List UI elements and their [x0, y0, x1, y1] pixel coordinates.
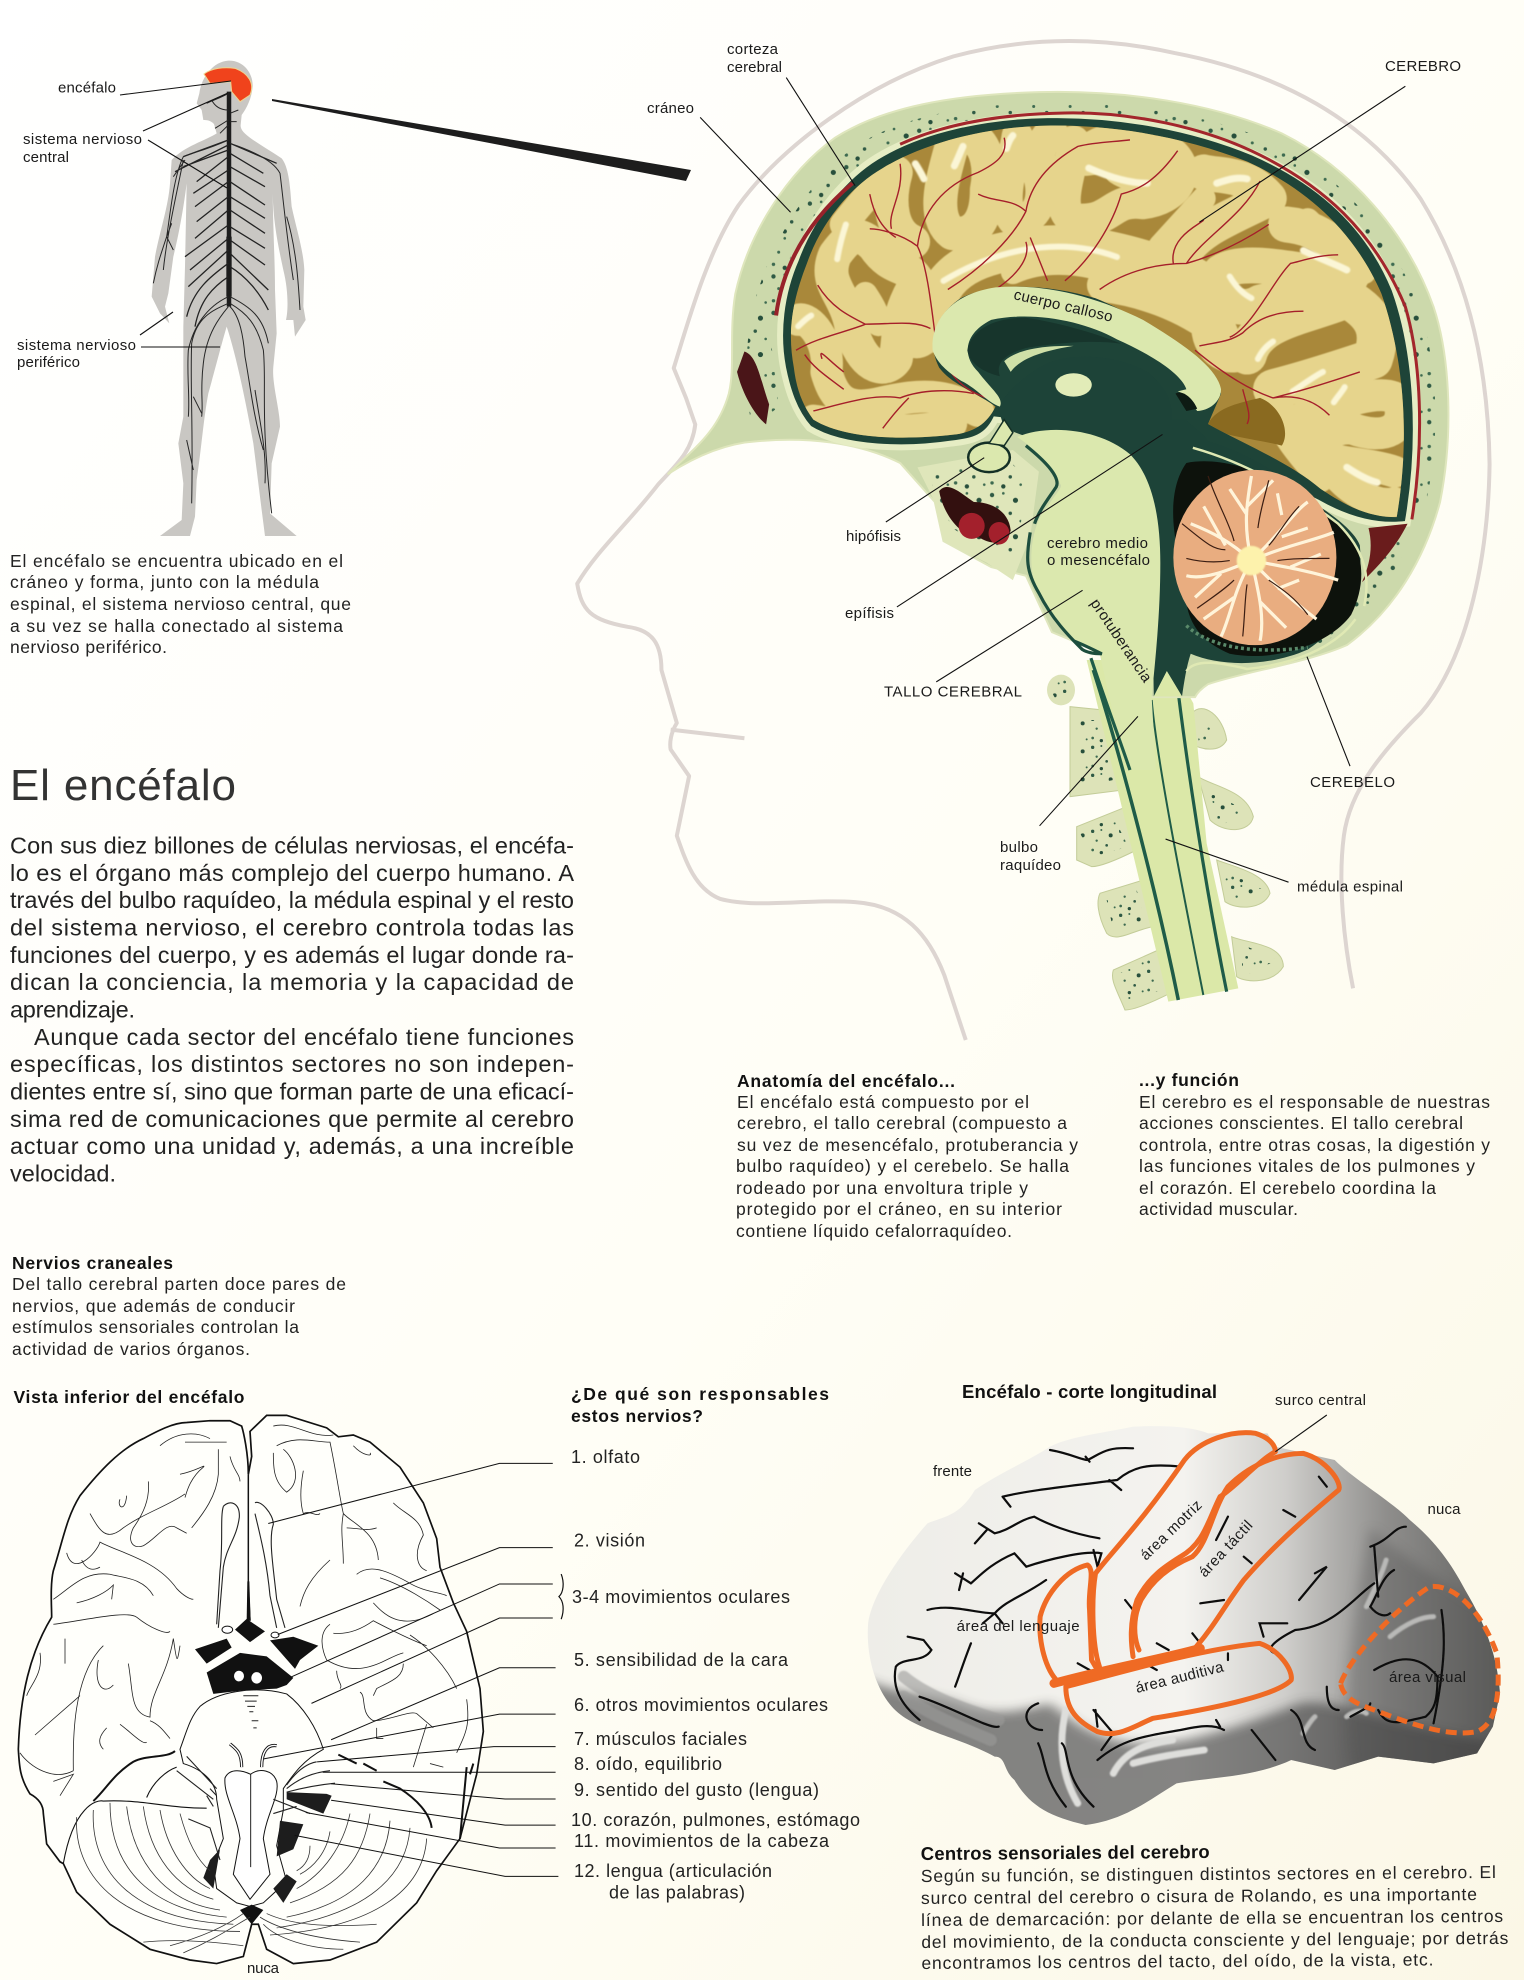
panel: nerve function list	[571, 1384, 860, 1902]
text block: main article: lo es el órgano más complejo del cuerpo humano. A	[10, 860, 574, 886]
head profile outline	[577, 41, 1490, 1040]
body silhouette with nerves	[152, 61, 306, 536]
leader lines	[700, 78, 1405, 882]
nerve 5: 5. sensibilidad de la cara	[574, 1650, 789, 1670]
heading: Encéfalo - corte longitudinal: Encéfalo - corte longitudinal	[962, 1381, 1217, 1402]
text block: sensory centres: surco central del cerebro o cisura de Rolando, es una importante	[921, 1884, 1477, 1908]
text block: cranial nerves	[12, 1253, 346, 1359]
text block: function	[1139, 1070, 1490, 1219]
massa intermedia	[1055, 373, 1092, 397]
pale wedge between cord tracts	[1154, 671, 1182, 696]
skin and skull	[668, 92, 1448, 697]
text block: anatomy: contiene líquido cefalorraquídeo.	[736, 1221, 1012, 1241]
leader lines	[120, 81, 231, 347]
text block: main article: actuar como una unidad y, además, a una increíble	[10, 1133, 574, 1159]
nerve 12: 12. lengua (articulación	[574, 1861, 772, 1881]
text block: main article	[10, 832, 574, 1186]
label: TALLO CEREBRAL: TALLO CEREBRAL	[884, 684, 1022, 700]
label: bulbo: bulbo	[1000, 839, 1038, 856]
nerve 12 second line: de las palabras)	[609, 1882, 745, 1902]
label: corteza cerebral: corteza	[727, 41, 779, 58]
label: CEREBRO: CEREBRO	[1385, 58, 1461, 75]
text block: anatomy: su vez de mesencéfalo, protuberancia y	[737, 1135, 1078, 1155]
text block: sensory centres: del movimiento, de la conducta consciente y del lenguaje; por detrás	[921, 1928, 1509, 1952]
text block: main article: sima red de comunicaciones que permite al cerebro	[10, 1106, 574, 1132]
nerve 1: 1. olfato	[571, 1447, 640, 1467]
label: sistema nervioso periférico: sistema nervioso	[17, 337, 136, 354]
text block: main article: aprendizaje.	[10, 996, 135, 1022]
text block: sensory centres: línea de demarcación: por delante de ella se encuentran los centros	[921, 1906, 1503, 1930]
text block: anatomy: rodeado por una envoltura triple y	[736, 1178, 1028, 1198]
text block: cranial nerves: Nervios craneales	[12, 1253, 173, 1273]
text block: main article: del sistema nervioso, el cerebro controla todas las	[10, 914, 574, 940]
label: área del lenguaje: área del lenguaje	[957, 1618, 1080, 1635]
text block: anatomy: Anatomía del encéfalo...	[737, 1071, 955, 1091]
text block: sensory centres: encontramos los centros del tacto, del oído, de la vista, etc.	[921, 1949, 1433, 1973]
panel: human nervous system figure	[17, 61, 306, 536]
illustration	[668, 92, 1448, 770]
heading: El encéfalo: El encéfalo	[10, 761, 236, 810]
label: área auditiva: área auditiva	[1134, 1658, 1226, 1697]
text block: anatomy	[736, 1071, 1078, 1241]
text block: main article: dientes entre sí, sino que forman parte de una eficací-	[10, 1078, 574, 1104]
text block: function: las funciones vitales de los pulmones y	[1139, 1156, 1475, 1176]
text block: cranial nerves: estímulos sensoriales controlan la	[12, 1317, 299, 1337]
label: sistema nervioso central: sistema nervioso	[23, 131, 142, 148]
label: periférico: periférico	[17, 354, 80, 371]
label: cráneo: cráneo	[647, 100, 694, 117]
leader lines	[264, 1463, 563, 1876]
label: CEREBELO: CEREBELO	[1310, 774, 1395, 791]
text block: function: ...y función	[1139, 1070, 1239, 1090]
label: encéfalo: encéfalo	[58, 80, 116, 96]
cerebellum dark pocket	[1173, 461, 1361, 656]
ventricle	[967, 318, 1121, 376]
text block: intro paragraph: cráneo y forma, junto con la médula	[10, 572, 319, 592]
blood vessels	[796, 138, 1360, 428]
text block: function: controla, entre otras cosas, la digestión y	[1139, 1135, 1490, 1155]
text block: main article: través del bulbo raquídeo, la médula espinal y el resto	[10, 887, 574, 913]
panel: lateral brain with sensory areas	[856, 1392, 1505, 1843]
text block: main article: velocidad.	[10, 1160, 116, 1186]
brain illustration	[856, 1415, 1505, 1843]
text block: intro paragraph: El encéfalo se encuentra ubicado en el	[10, 551, 343, 571]
arrow: pointer from head to enlarged brain	[272, 99, 691, 181]
label: cerebral: cerebral	[727, 59, 782, 76]
text block: main article: Con sus diez billones de células nerviosas, el encéfa-	[10, 832, 574, 858]
text block: main article: específicas, los distintos sectores no son indepen-	[10, 1051, 574, 1077]
lower spinal cord and vertebrae	[1047, 660, 1283, 1010]
text block: function: actividad muscular.	[1139, 1199, 1298, 1219]
stem edges	[1026, 446, 1102, 654]
text block: main article: dican la conciencia, la memoria y la capacidad de	[10, 969, 574, 995]
nerve 11: 11. movimientos de la cabeza	[574, 1831, 830, 1851]
text block: main article: Aunque cada sector del encéfalo tiene funciones	[34, 1024, 574, 1050]
text block: sensory centres: Según su función, se distinguen distintos sectores en el cerebro. El	[921, 1862, 1496, 1886]
label: surco central: surco central	[1275, 1392, 1366, 1409]
text block: anatomy: El encéfalo está compuesto por el	[737, 1092, 1029, 1112]
cerebrum gyri	[790, 126, 1404, 518]
red sinus shapes	[737, 352, 769, 424]
label: nuca: nuca	[1428, 1501, 1461, 1518]
panel: brain cross-section	[647, 41, 1461, 1010]
nerve 9: 9. sentido del gusto (lengua)	[574, 1780, 819, 1800]
label: nuca: nuca	[247, 1960, 280, 1977]
corpus callosum	[932, 287, 1221, 411]
label: epífisis: epífisis	[845, 605, 894, 622]
brain drawing	[18, 1415, 483, 1964]
text block: sensory centres	[921, 1839, 1509, 1973]
stalk	[989, 420, 1013, 446]
question heading line 2: estos nervios?	[571, 1406, 703, 1426]
label: central: central	[23, 149, 69, 166]
brain stem	[1017, 430, 1160, 770]
heading: Vista inferior del encéfalo: Vista inferior del encéfalo	[14, 1387, 244, 1407]
nerve 6: 6. otros movimientos oculares	[574, 1695, 828, 1715]
text block: cranial nerves: Del tallo cerebral parten doce pares de	[12, 1274, 346, 1294]
text block: function: el corazón. El cerebelo coordina la	[1139, 1178, 1436, 1198]
nerve 8: 8. oído, equilibrio	[574, 1754, 722, 1774]
label: cerebro medio: cerebro medio	[1047, 535, 1148, 552]
nerves 3-4: 3-4 movimientos oculares	[572, 1587, 790, 1607]
cerebellum arbor	[1182, 476, 1338, 641]
nerve 2: 2. visión	[574, 1530, 645, 1550]
label: área táctil: área táctil	[1195, 1517, 1256, 1581]
membrane	[780, 115, 1416, 525]
text block: anatomy: protegido por el cráneo, en su interior	[736, 1199, 1062, 1219]
label: hipófisis: hipófisis	[846, 528, 901, 545]
pale membrane over cerebellum	[1186, 448, 1367, 671]
small pale ventricle strip	[1004, 346, 1074, 372]
text block: sensory centres: Centros sensoriales del cerebro	[921, 1841, 1210, 1864]
question heading: ¿De qué son responsables	[571, 1384, 829, 1404]
cerebellum foliage	[1173, 470, 1336, 645]
text block: anatomy: bulbo raquídeo) y el cerebelo. Se halla	[736, 1156, 1069, 1176]
dark core around stem	[998, 357, 1360, 696]
label: o mesencéfalo: o mesencéfalo	[1047, 552, 1150, 569]
text block: cranial nerves: actividad de varios órganos.	[12, 1339, 250, 1359]
cerebellum ribbing	[1186, 626, 1308, 650]
text block: intro paragraph: a su vez se halla conectado al sistema	[10, 616, 343, 636]
text block: cranial nerves: nervios, que además de conducir	[12, 1296, 295, 1316]
label: médula espinal: médula espinal	[1297, 878, 1403, 896]
stalk and pituitary	[968, 443, 1010, 472]
label: protuberancia: protuberancia	[1087, 596, 1155, 686]
text block: function: acciones conscientes. El tallo cerebral	[1139, 1113, 1463, 1133]
text block: intro paragraph	[10, 551, 351, 657]
nerve 10: 10. corazón, pulmones, estómago	[571, 1810, 860, 1830]
label: raquídeo: raquídeo	[1000, 857, 1061, 874]
text block: main article: funciones del cuerpo, y es además el lugar donde ra-	[10, 942, 574, 968]
text block: anatomy: cerebro, el tallo cerebral (compuesto a	[737, 1113, 1067, 1133]
panel: inferior view of the brain	[18, 1415, 563, 1977]
cerebellum centre	[1237, 546, 1266, 575]
text block: function: El cerebro es el responsable de nuestras	[1139, 1092, 1490, 1112]
text block: intro paragraph: nervioso periférico.	[10, 637, 167, 657]
label: frente: frente	[933, 1463, 972, 1480]
text block: intro paragraph: espinal, el sistema nervioso central, que	[10, 594, 351, 614]
label: área motriz: área motriz	[1137, 1497, 1206, 1564]
nerve 7: 7. músculos faciales	[574, 1729, 747, 1749]
label: cuerpo calloso: cuerpo calloso	[1012, 286, 1114, 326]
pineal notch	[1176, 392, 1197, 411]
label: área visual: área visual	[1389, 1669, 1466, 1686]
